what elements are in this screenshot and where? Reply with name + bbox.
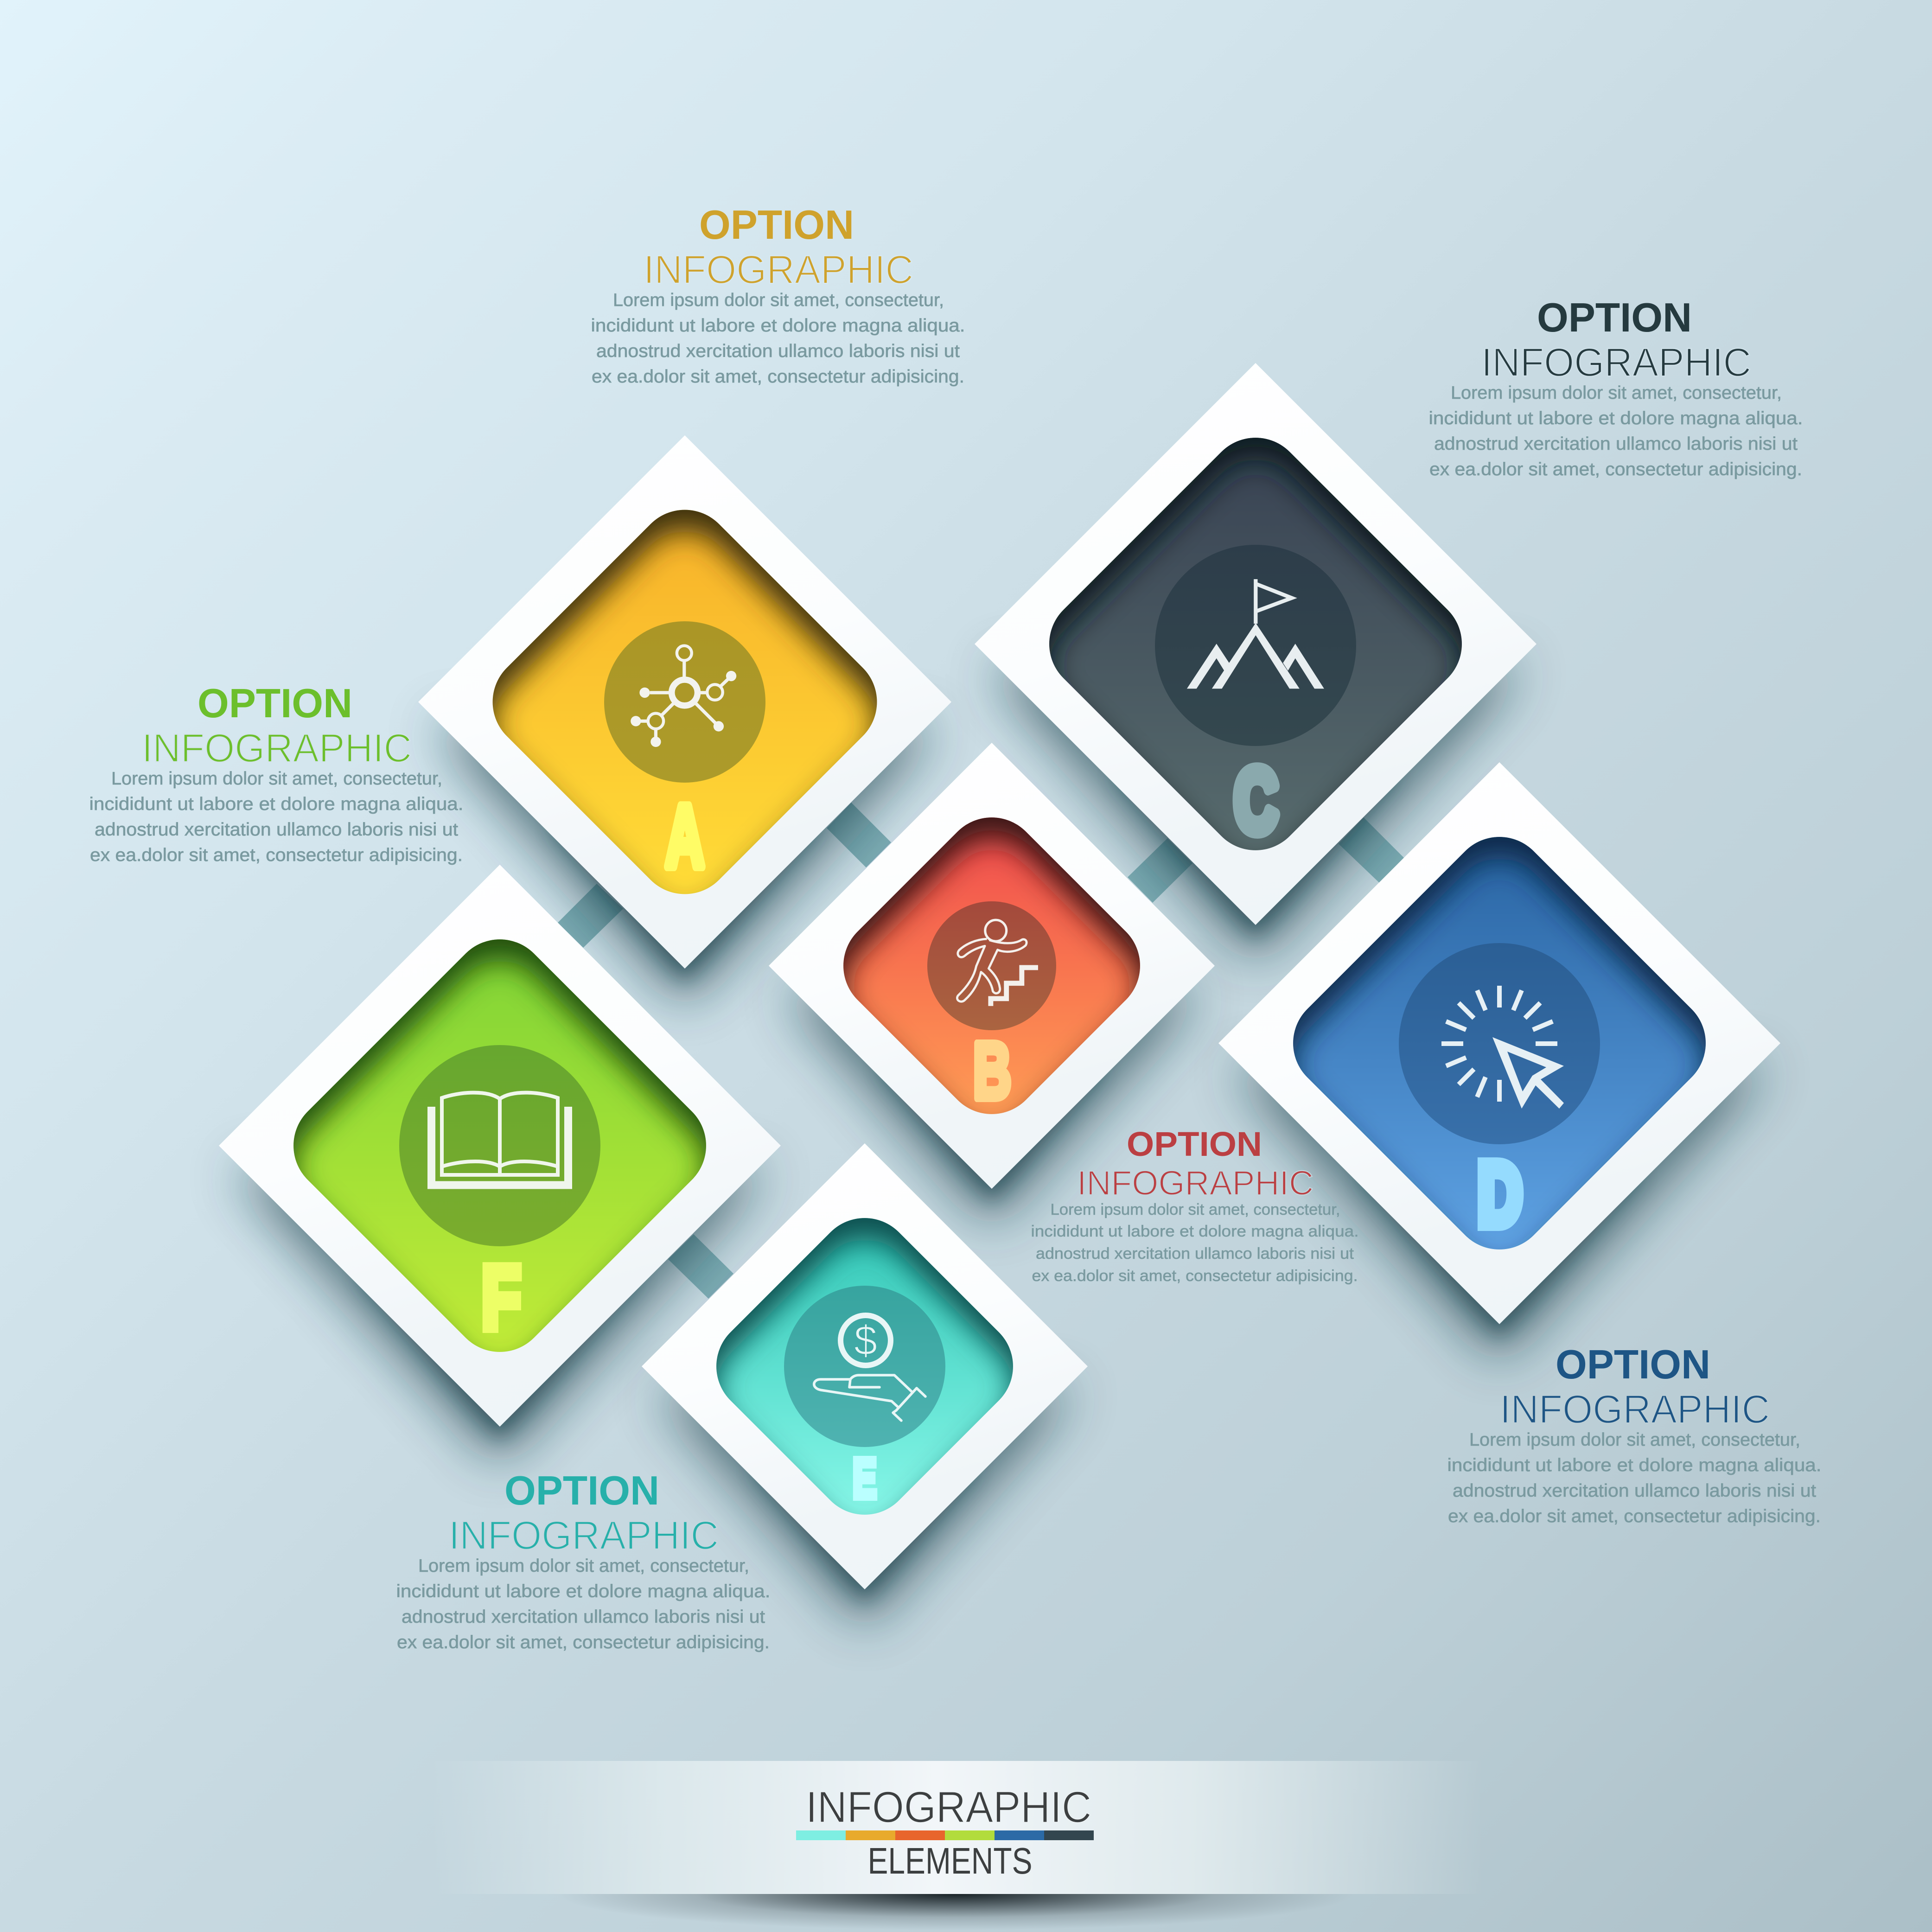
coloured window F bbox=[293, 939, 706, 1352]
coloured window B bbox=[843, 817, 1140, 1114]
heading: OPTION bbox=[198, 680, 352, 726]
text block: green option bbox=[89, 680, 464, 865]
subheading: INFOGRAPHIC bbox=[1077, 1164, 1314, 1202]
letter A: A bbox=[665, 788, 704, 886]
panel: diamond C bbox=[975, 363, 1537, 925]
text block: dark option bbox=[1429, 294, 1803, 479]
icon circle B bbox=[927, 901, 1056, 1030]
icon: hand holding coin bbox=[814, 1315, 925, 1421]
icon circle C bbox=[1155, 545, 1356, 746]
heading: OPTION bbox=[504, 1467, 659, 1513]
icon circle D bbox=[1399, 943, 1600, 1144]
icon: runner on stairs bbox=[957, 920, 1038, 1006]
body text: adnostrud xercitation ullamco laboris nisi ut bbox=[402, 1607, 765, 1627]
panel: diamond B bbox=[769, 743, 1215, 1189]
footer subtitle: ELEMENTS bbox=[868, 1840, 1032, 1881]
coloured window C bbox=[1049, 438, 1462, 850]
body text: adnostrud xercitation ullamco laboris nisi ut bbox=[596, 341, 960, 361]
icon circle F bbox=[399, 1045, 600, 1246]
body text: incididunt ut labore et dolore magna aliqua. bbox=[1429, 408, 1803, 428]
body text: adnostrud xercitation ullamco laboris nisi ut bbox=[1434, 434, 1798, 454]
white frame C bbox=[975, 363, 1537, 925]
body text: incididunt ut labore et dolore magna aliqua. bbox=[1031, 1223, 1358, 1240]
panel: diamond F bbox=[129, 796, 871, 1538]
connector bars bbox=[558, 803, 1404, 1299]
heading: OPTION bbox=[699, 202, 854, 248]
letter B: B bbox=[973, 1026, 1011, 1116]
body text: ex ea.dolor sit amet, consectetur adipisicing. bbox=[1448, 1506, 1821, 1526]
body text: Lorem ipsum dolor sit amet, consectetur, bbox=[418, 1556, 749, 1576]
body text: ex ea.dolor sit amet, consectetur adipisicing. bbox=[1429, 459, 1802, 479]
body text: Lorem ipsum dolor sit amet, consectetur, bbox=[613, 290, 944, 310]
body text: adnostrud xercitation ullamco laboris nisi ut bbox=[95, 820, 458, 840]
body text: ex ea.dolor sit amet, consectetur adipisicing. bbox=[397, 1632, 770, 1652]
panel: diamond E bbox=[587, 1109, 1143, 1666]
body text: incididunt ut labore et dolore magna aliqua. bbox=[591, 316, 965, 336]
subheading: INFOGRAPHIC bbox=[1481, 340, 1751, 385]
subheading: INFOGRAPHIC bbox=[644, 248, 913, 292]
text block: blue option bbox=[1447, 1341, 1821, 1526]
text block: teal option bbox=[396, 1467, 771, 1652]
body text: Lorem ipsum dolor sit amet, consectetur, bbox=[111, 769, 442, 789]
white frame F bbox=[219, 865, 781, 1427]
white frame A bbox=[418, 435, 951, 969]
icon: open book bbox=[431, 1093, 568, 1185]
icon: hand holding coin: $ bbox=[854, 1318, 877, 1364]
colour strip bbox=[796, 1830, 1094, 1840]
body text bbox=[1429, 383, 1803, 479]
icon: cursor click bbox=[1441, 986, 1564, 1109]
body text: Lorem ipsum dolor sit amet, consectetur, bbox=[1051, 1201, 1340, 1218]
coloured window D bbox=[1293, 837, 1706, 1250]
body text: adnostrud xercitation ullamco laboris nisi ut bbox=[1453, 1481, 1816, 1501]
body text bbox=[591, 290, 965, 387]
coloured window A bbox=[493, 510, 877, 894]
white frame D bbox=[1218, 762, 1780, 1324]
heading: OPTION bbox=[1127, 1125, 1262, 1163]
panel: diamond A bbox=[418, 435, 951, 969]
subheading: INFOGRAPHIC bbox=[1500, 1387, 1770, 1432]
white frame E bbox=[642, 1143, 1088, 1589]
footer banner bbox=[431, 1761, 1484, 1930]
coloured window E bbox=[716, 1218, 1013, 1515]
body text: ex ea.dolor sit amet, consectetur adipisicing. bbox=[1032, 1267, 1358, 1285]
text block: red option bbox=[1031, 1125, 1358, 1285]
body text bbox=[396, 1556, 771, 1652]
body text: adnostrud xercitation ullamco laboris nisi ut bbox=[1036, 1245, 1354, 1262]
footer title: INFOGRAPHIC bbox=[806, 1783, 1091, 1832]
heading: OPTION bbox=[1537, 294, 1692, 340]
body text: Lorem ipsum dolor sit amet, consectetur, bbox=[1451, 383, 1782, 403]
subheading: INFOGRAPHIC bbox=[142, 726, 412, 771]
body text: ex ea.dolor sit amet, consectetur adipisicing. bbox=[90, 845, 463, 865]
body text bbox=[1031, 1201, 1358, 1285]
letter D: D bbox=[1478, 1145, 1522, 1244]
body text: ex ea.dolor sit amet, consectetur adipisicing. bbox=[592, 367, 964, 387]
icon circle A bbox=[604, 621, 765, 783]
body text: incididunt ut labore et dolore magna aliqua. bbox=[396, 1581, 771, 1601]
body text: incididunt ut labore et dolore magna aliqua. bbox=[89, 794, 464, 814]
icon circle E bbox=[784, 1286, 945, 1447]
subheading: INFOGRAPHIC bbox=[449, 1513, 719, 1558]
body text: Lorem ipsum dolor sit amet, consectetur, bbox=[1469, 1430, 1800, 1450]
body text bbox=[89, 769, 464, 865]
panel: diamond D bbox=[1129, 694, 1870, 1435]
body text bbox=[1447, 1430, 1821, 1526]
diamond drop shadows bbox=[233, 667, 1766, 1624]
heading: OPTION bbox=[1556, 1341, 1710, 1387]
letter E: E bbox=[853, 1447, 877, 1510]
text block: amber option bbox=[591, 202, 965, 387]
letter C: C bbox=[1235, 750, 1277, 850]
icon: network nodes bbox=[631, 646, 736, 747]
white frame B bbox=[769, 743, 1215, 1189]
body text: incididunt ut labore et dolore magna aliqua. bbox=[1447, 1455, 1821, 1475]
letter F: F bbox=[482, 1248, 521, 1347]
icon: mountain with flag bbox=[1187, 579, 1324, 689]
